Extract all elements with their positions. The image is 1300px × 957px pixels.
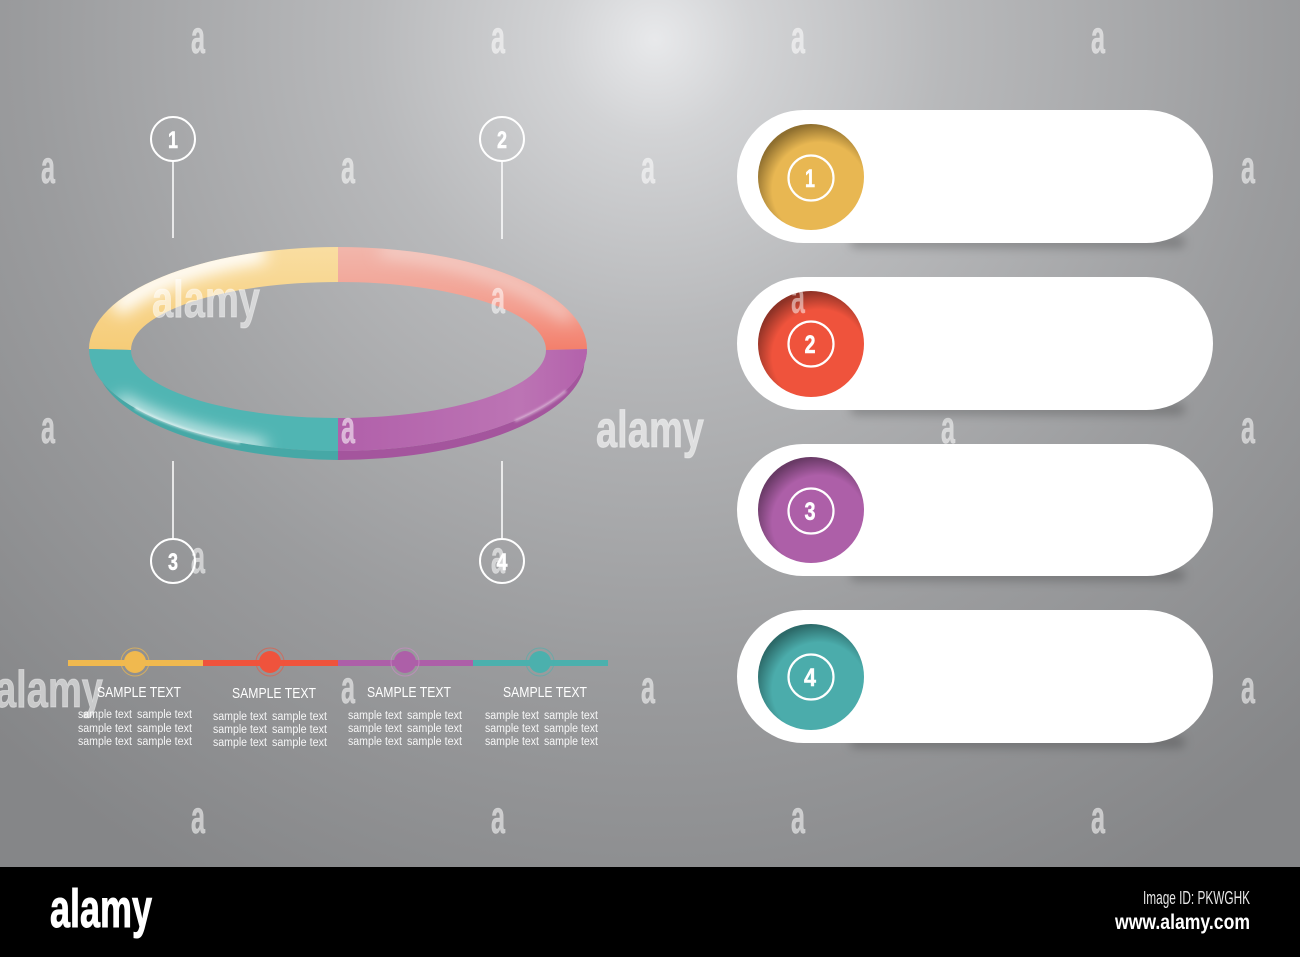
text block 4: sample text [544,723,599,735]
text block 3: sample text [407,736,463,748]
watermarks: a [1091,791,1105,843]
panel: pill 2: 2 [804,331,816,359]
text block 4: SAMPLE TEXT [503,684,587,701]
text block 1: sample text [78,723,133,735]
watermarks: a [491,791,505,843]
watermarks: a [41,141,55,193]
text block 1: sample text [137,736,193,748]
footer logo: alamy [50,879,152,939]
panel: pill 2 [737,271,1213,415]
text block 2: sample text [213,724,268,736]
callout 3 [151,461,195,583]
ring segment 4: teal [85,345,340,455]
timeline marker 1 [121,648,149,676]
ring highlight: teal [135,408,240,443]
text block 3: sample text [348,736,403,748]
text block 1: sample text [137,723,193,735]
callout 4 [480,461,524,583]
watermarks: a [1241,661,1255,713]
text block 2 [213,685,328,749]
text block 3: sample text [348,723,403,735]
timeline marker 2 [256,648,284,676]
watermarks: a [941,401,955,453]
watermarks: a [341,141,355,193]
text block 2: SAMPLE TEXT [232,685,316,702]
text block 1: sample text [137,709,193,721]
watermarks: a [191,531,205,583]
text block 2: sample text [272,711,328,723]
text block 4: sample text [485,736,540,748]
text block 2: sample text [272,724,328,736]
panel: pill 3: 3 [804,498,816,526]
watermarks: a [791,791,805,843]
ring highlight: purple [515,391,566,421]
text block 4: sample text [544,710,599,722]
text block 1: sample text [78,736,133,748]
panel: pill 1 [737,110,1213,248]
watermarks: a [191,11,205,63]
watermarks: a [341,401,355,453]
watermarks: a [491,271,505,323]
text block 3: sample text [407,723,463,735]
text block 3: sample text [407,710,463,722]
watermark in circle 2: a [791,271,805,323]
ring side wall [92,349,587,460]
watermark logo: ring: alamy [152,271,260,329]
text block 1 [78,684,193,748]
text block 3: sample text [348,710,403,722]
timeline bar [68,648,608,676]
text block 4: sample text [544,736,599,748]
text block 3 [348,684,463,748]
watermarks: a [491,531,505,583]
watermarks: a [641,141,655,193]
ring segment 3: purple [338,349,587,451]
text block 3: SAMPLE TEXT [367,684,451,701]
callout 4: 4 [496,549,508,576]
footer url: www.alamy.com [1114,911,1250,934]
panel: pill 4 [737,610,1213,748]
footer bar [0,867,1300,957]
timeline marker 3 [391,648,419,676]
watermarks: a [791,11,805,63]
callout 1: 1 [168,127,178,154]
text block 4 [485,684,599,748]
text block 4: sample text [485,710,540,722]
callout 2: 2 [497,127,507,154]
watermarks: a [341,661,355,713]
watermarks: a [191,791,205,843]
panel: pill 1: 1 [805,165,815,193]
panel: ring diagram [85,245,591,460]
callout 1 [151,117,195,238]
callout 3: 3 [168,549,178,576]
ring segment 2: coral [336,245,591,355]
watermarks: a [1091,11,1105,63]
panel: pill 3 [737,444,1213,581]
watermarks: a [641,661,655,713]
text block 1: SAMPLE TEXT [97,684,181,701]
text block 1: sample text [78,709,133,721]
watermarks: a [41,401,55,453]
text block 2: sample text [213,737,268,749]
timeline marker 4 [526,648,554,676]
text block 2: sample text [272,737,328,749]
watermarks: a [491,11,505,63]
watermarks: a [1241,141,1255,193]
callout 2 [480,117,524,239]
panel: pill 4: 4 [804,664,816,692]
text block 2: sample text [213,711,268,723]
watermarks: a [1241,401,1255,453]
watermark logo: centre: alamy [596,401,704,459]
text block 4: sample text [485,723,540,735]
ring segment 1: yellow [85,245,340,355]
